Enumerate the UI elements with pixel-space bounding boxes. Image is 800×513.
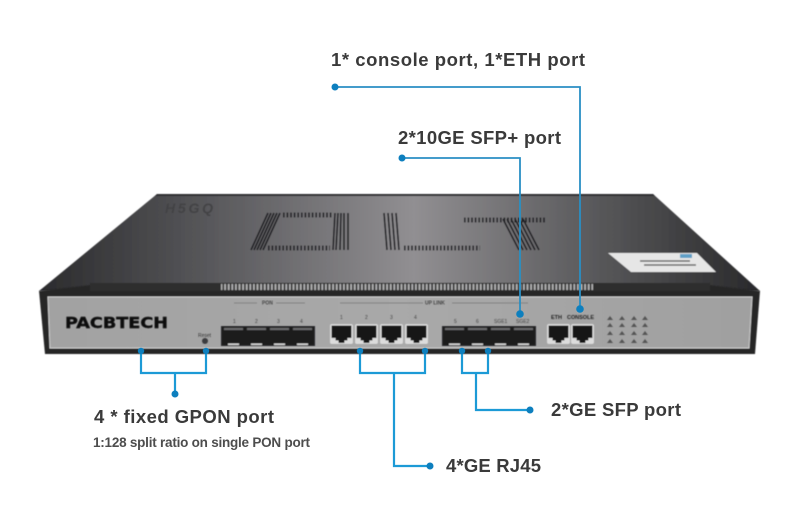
callout: 10GE SFP+ port: 2*10GE SFP+ port [398,127,561,148]
callout: GE RJ45: 4*GE RJ45 [446,455,541,476]
callout: fixed GPON port [93,348,310,450]
uplink SFP ports [442,326,536,346]
PON group label: 3 [277,319,280,325]
reset button: Reset [198,333,212,339]
status LED icons [607,316,648,343]
callout: GE SFP port [459,348,681,420]
callout: GE RJ45 [357,348,541,476]
ETH and CONSOLE ports [547,315,594,344]
UPLINK group label [340,300,530,325]
RJ45 ports 1-4 [330,324,428,344]
callout: fixed GPON port: 1:128 split ratio on single PON port [93,435,310,450]
callout: console and ETH port [331,49,585,313]
PON group label: PON [262,300,273,306]
product label sticker [608,253,716,272]
UPLINK group label: 6 [476,319,479,325]
callout: GE SFP port: 2*GE SFP port [551,399,681,420]
UPLINK group label: 2 [365,315,368,321]
reset button [198,333,212,344]
OLT vent: letter L [384,213,480,250]
device: front frame [39,283,760,354]
UPLINK group label: 4 [414,315,417,321]
PON group label: 2 [255,319,258,325]
UPLINK group label: UP LINK [425,300,445,306]
OLT vent: letter T [464,219,545,250]
callout: 10GE SFP+ port [398,127,561,318]
logo: PACBTECH: PACBTECH [65,314,168,332]
PON group label [233,300,305,325]
UPLINK group label: 1 [340,315,343,321]
UPLINK group label: 3 [390,315,393,321]
front vent slots [221,284,593,290]
UPLINK group label: SGE2 [516,319,530,325]
PON group label: 1 [233,319,236,325]
ETH and CONSOLE ports: ETH [551,315,562,321]
UPLINK group label: SGE1 [494,319,508,325]
UPLINK group label: 5 [454,319,457,325]
callout: console and ETH port: 1* console port, 1*ETH port [331,49,585,70]
callout: fixed GPON port: 4 * fixed GPON port [94,406,274,427]
brand emboss on cover: H5GQ [165,200,213,216]
device: top cover [39,194,760,291]
OLT vent: letter O [251,213,348,250]
PON group label: 4 [300,319,303,325]
PON SFP ports [221,326,315,346]
front panel [48,297,752,348]
ETH and CONSOLE ports: CONSOLE [567,315,594,321]
